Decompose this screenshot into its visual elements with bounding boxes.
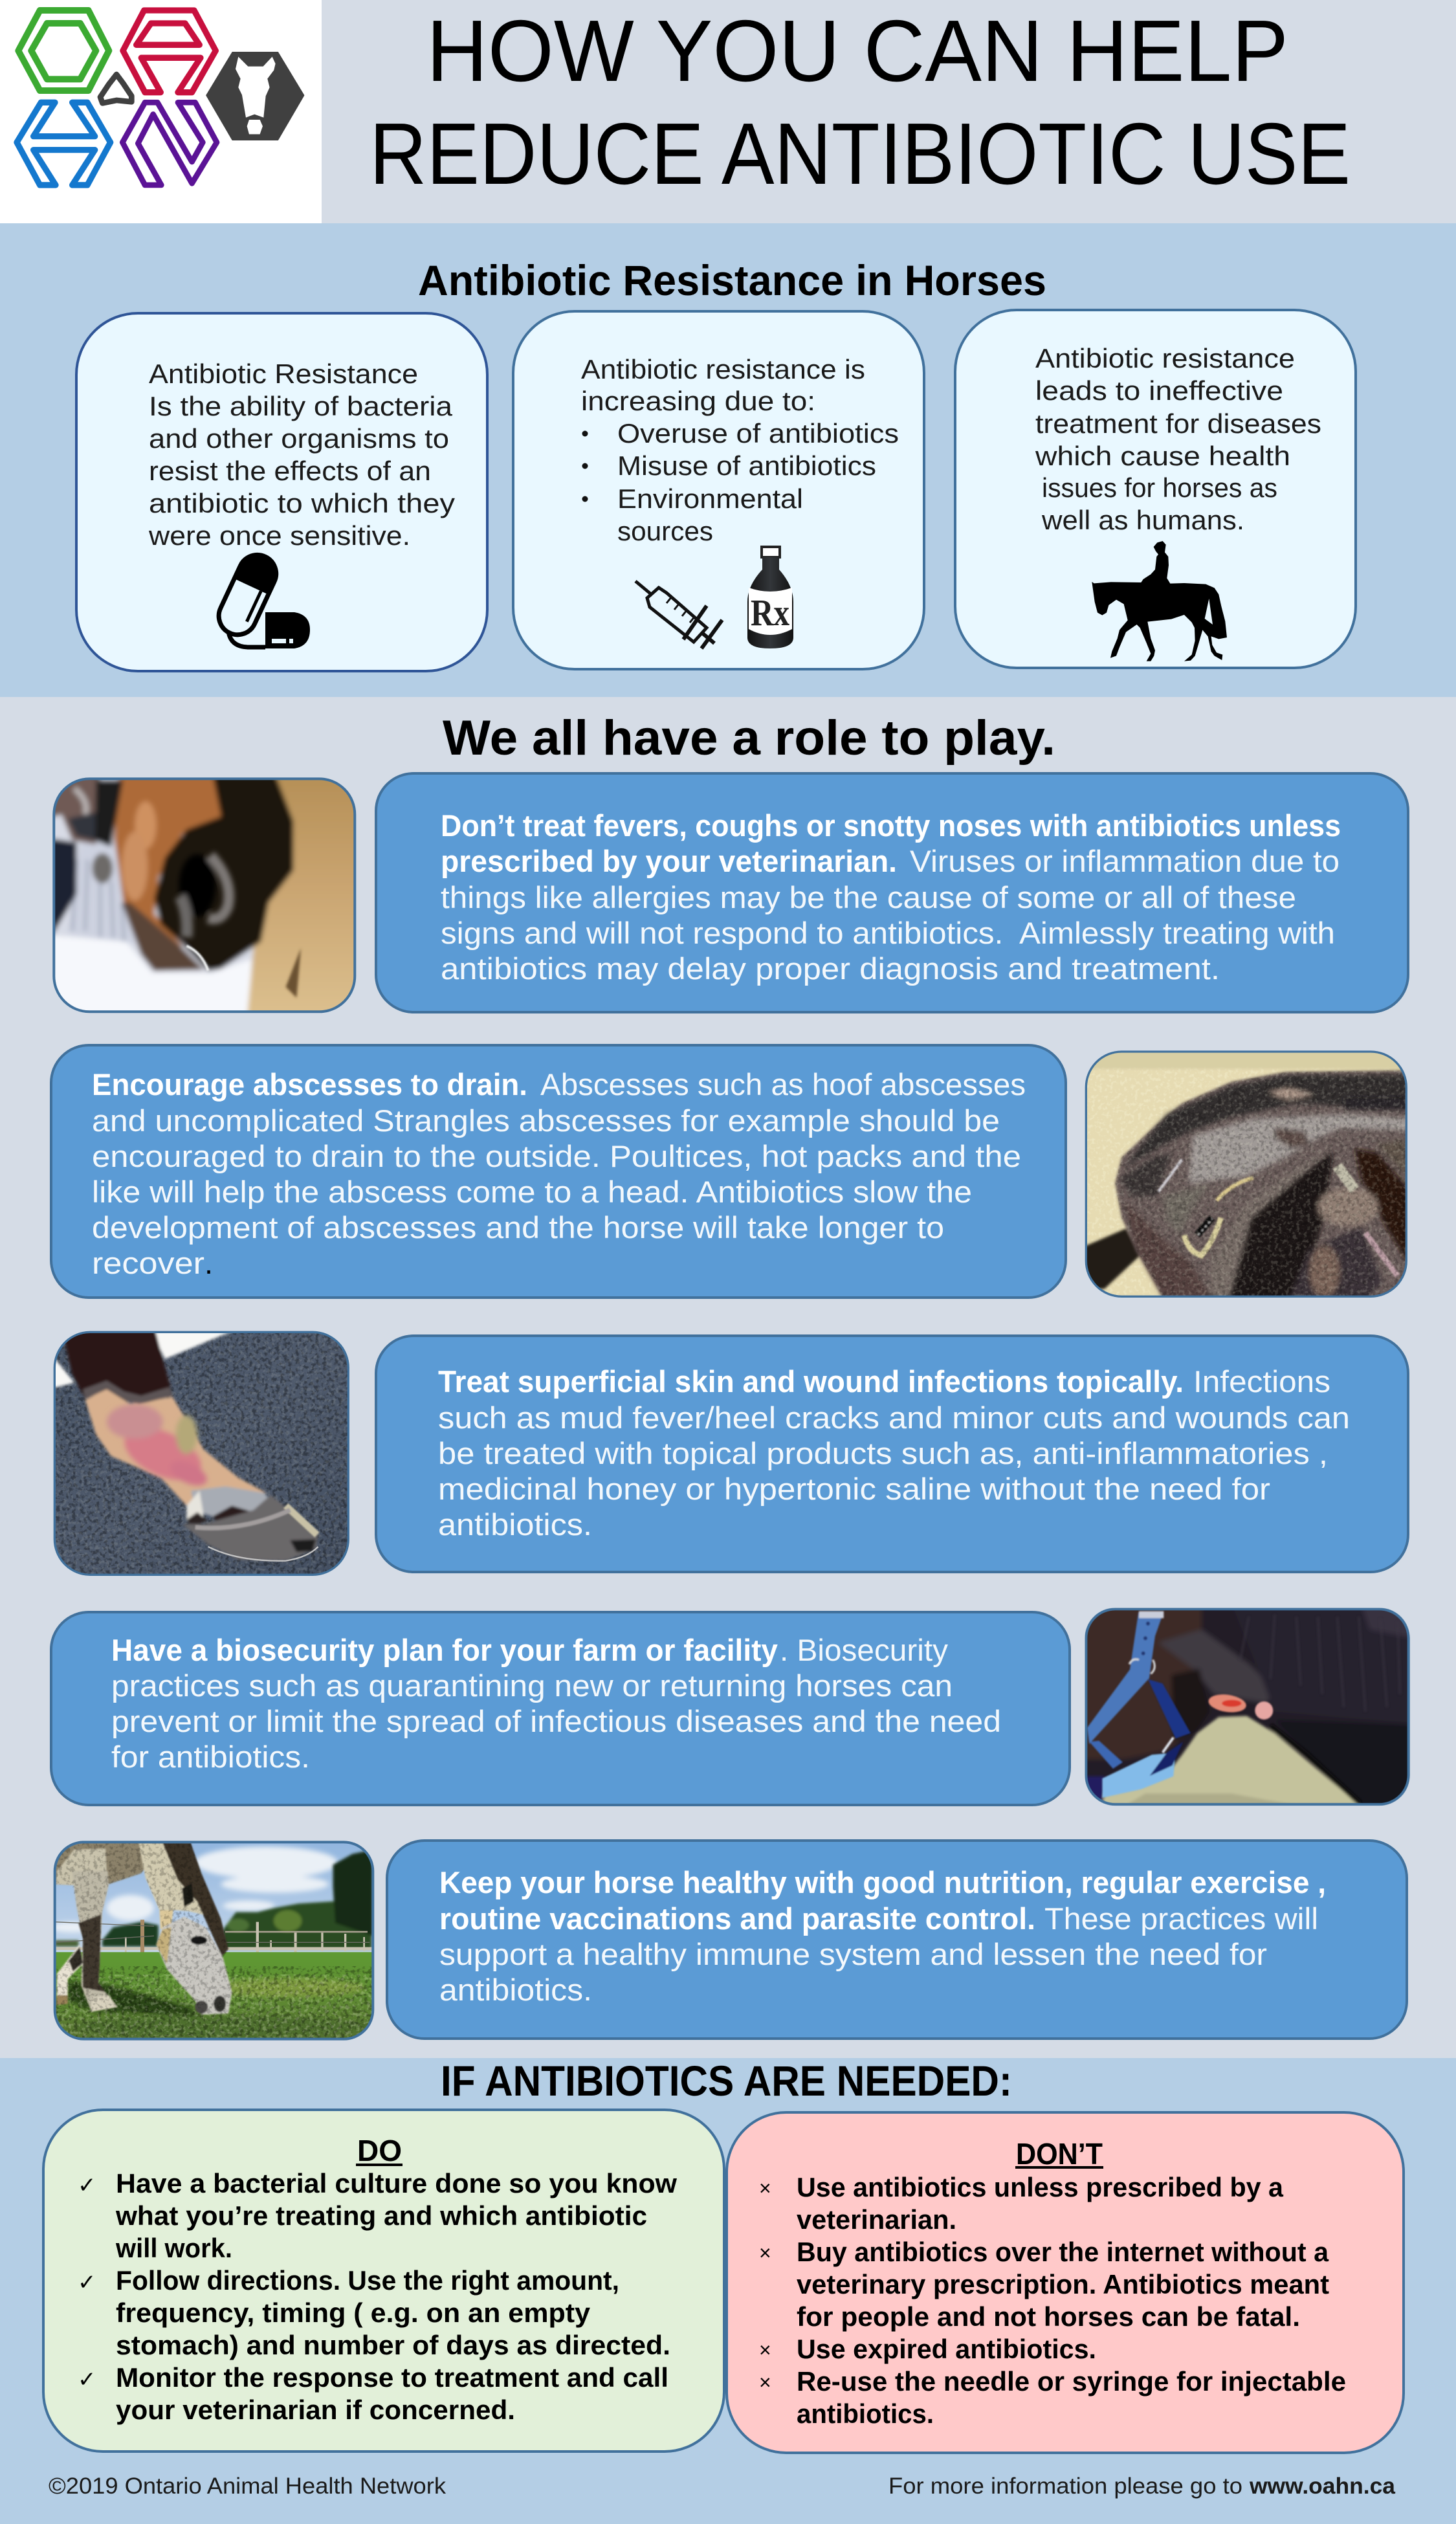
heading: we all have a role to play: We all have a role to play. <box>443 711 1055 766</box>
card: consequences: which cause health <box>1035 441 1290 471</box>
footer: copyright: ©2019 Ontario Animal Health Network <box>49 2474 447 2499</box>
card: consequences: treatment for diseases <box>1035 408 1321 439</box>
panel: don't: × <box>759 2176 771 2200</box>
panel: do: ✓ <box>78 2367 96 2393</box>
panel: encourage abscesses to drain: development of abscesses and the horse will take longer to <box>92 1210 944 1245</box>
panel: don't: Use antibiotics unless prescribed by a <box>797 2172 1284 2202</box>
panel: encourage abscesses to drain: and uncomplicated Strangles abscesses for example should be <box>92 1103 1000 1138</box>
icon: capsules <box>213 549 310 648</box>
panel: treat topically <box>376 1336 1408 1572</box>
panel: biosecurity plan: for antibiotics. <box>111 1740 310 1774</box>
panel: keep your horse healthy: antibiotics. <box>439 1973 592 2007</box>
panel: do: Have a bacterial culture done so you know <box>116 2168 677 2198</box>
panel: keep your horse healthy: These practices will <box>1044 1901 1318 1936</box>
card: definition <box>76 313 487 671</box>
card: causes <box>513 311 924 669</box>
card: causes: sources <box>617 516 713 546</box>
icon: syringe <box>635 581 722 648</box>
card: definition: antibiotic to which they <box>149 488 455 518</box>
card: consequences: well as humans. <box>1041 505 1244 535</box>
panel: do: will work. <box>115 2233 232 2263</box>
panel: encourage abscesses to drain: Abscesses such as hoof abscesses <box>540 1067 1026 1101</box>
card: causes: increasing due to: <box>581 386 815 416</box>
card: causes: Antibiotic resistance is <box>581 354 865 384</box>
card: consequences: Antibiotic resistance <box>1035 343 1295 373</box>
photo: leg with skin infection <box>49 1327 356 1582</box>
heading: antibiotic resistance in horses: Antibiotic Resistance in Horses <box>418 256 1046 304</box>
panel: don't: × <box>759 2241 771 2264</box>
title <box>370 2 1351 203</box>
panel: do: stomach) and number of days as directed. <box>116 2330 670 2360</box>
panel: biosecurity plan: Have a biosecurity plan for your farm or facility <box>111 1633 778 1667</box>
panel: treat topically: Treat superficial skin and wound infections topically. <box>438 1364 1184 1399</box>
panel: don't: antibiotics. <box>797 2398 934 2429</box>
panel: do <box>43 2110 724 2452</box>
panel: don't: Re-use the needle or syringe for injectable <box>797 2366 1346 2397</box>
card: definition: were once sensitive. <box>148 520 410 551</box>
panel: do: your veterinarian if concerned. <box>116 2395 515 2425</box>
panel: do: Monitor the response to treatment and call <box>116 2362 668 2393</box>
panel: don't treat fevers: antibiotics may delay proper diagnosis and treatment. <box>441 951 1220 986</box>
panel: do: ✓ <box>78 2173 96 2198</box>
panel: treat topically: be treated with topical products such as, anti-inflammatories , <box>438 1436 1328 1470</box>
panel: don't: × <box>759 2338 771 2362</box>
photo: horse nose with discharge <box>49 773 362 1019</box>
panel: keep your horse healthy <box>387 1841 1407 2039</box>
panel: do: frequency, timing ( e.g. on an empty <box>116 2297 591 2328</box>
card: definition: Antibiotic Resistance <box>149 359 418 389</box>
card: definition: resist the effects of an <box>149 456 431 486</box>
panel: treat topically: medicinal honey or hypertonic saline without the need for <box>438 1472 1270 1506</box>
panel: don't: veterinarian. <box>797 2204 956 2235</box>
panel: don't: DON’T <box>1016 2137 1103 2171</box>
panel: don't: × <box>759 2371 771 2394</box>
panel: encourage abscesses to drain: . <box>204 1246 213 1280</box>
footer: more information link <box>888 2474 1396 2499</box>
title: REDUCE ANTIBIOTIC USE <box>370 105 1351 203</box>
panel: biosecurity plan: prevent or limit the spread of infectious diseases and the need <box>111 1704 1001 1738</box>
panel: encourage abscesses to drain: Encourage abscesses to drain. <box>92 1067 527 1101</box>
panel: encourage abscesses to drain: recover <box>92 1246 204 1280</box>
card: definition: and other organisms to <box>149 423 449 454</box>
panel: do: ✓ <box>78 2270 96 2296</box>
panel: don't treat fevers: things like allergies may be the cause of some or all of these <box>441 880 1296 914</box>
panel: keep your horse healthy: support a healthy immune system and lessen the need for <box>439 1937 1267 1971</box>
panel: encourage abscesses to drain <box>51 1045 1066 1298</box>
photo: hoof abscess <box>1081 1045 1414 1304</box>
section: antibiotic resistance band <box>0 223 1456 697</box>
card: causes: Overuse of antibiotics <box>617 418 899 448</box>
heading: if antibiotics are needed: IF ANTIBIOTICS ARE NEEDED: <box>441 2057 1012 2105</box>
card: consequences: leads to ineffective <box>1035 375 1283 406</box>
panel: treat topically: Infections <box>1193 1364 1330 1399</box>
icon: Rx bottle <box>747 547 793 648</box>
card: causes: Misuse of antibiotics <box>617 450 876 481</box>
panel: don't: Buy antibiotics over the internet without a <box>797 2237 1329 2267</box>
header: logo <box>0 0 322 223</box>
card: consequences: issues for horses as <box>1042 472 1277 503</box>
panel: do: what you’re treating and which antibiotic <box>115 2200 647 2231</box>
card: causes: Environmental <box>617 483 803 514</box>
card: consequences <box>955 310 1356 668</box>
panel: encourage abscesses to drain: encouraged to drain to the outside. Poultices, hot packs and the <box>92 1139 1021 1173</box>
icon: horse and rider <box>1092 541 1227 661</box>
panel: don't treat fevers: Viruses or inflammation due to <box>910 844 1340 878</box>
panel: do: DO <box>357 2134 402 2167</box>
icon: Rx bottle: Rx <box>751 592 789 634</box>
panel: don't: for people and not horses can be fatal. <box>797 2301 1300 2332</box>
panel: keep your horse healthy: routine vaccinations and parasite control. <box>439 1901 1035 1936</box>
panel: treat topically: such as mud fever/heel cracks and minor cuts and wounds can <box>438 1400 1350 1435</box>
panel: don't: Use expired antibiotics. <box>797 2334 1096 2364</box>
panel: don't: veterinary prescription. Antibiotics meant <box>797 2269 1329 2299</box>
photo: grey horse grazing <box>50 1837 381 2042</box>
panel: biosecurity plan: . Biosecurity <box>780 1633 948 1667</box>
panel: don't treat fevers: signs and will not respond to antibiotics. Aimlessly treating with <box>441 916 1335 950</box>
footer: more information link: For more information please go to <box>888 2474 1242 2499</box>
panel: biosecurity plan <box>51 1612 1070 1805</box>
panel: don't <box>727 2112 1404 2453</box>
section: if antibiotics are needed band <box>0 2057 1456 2524</box>
panel: encourage abscesses to drain: like will help the abscess come to a head. Antibiotics slow the <box>92 1175 972 1209</box>
panel: biosecurity plan: practices such as quarantining new or returning horses can <box>111 1668 953 1703</box>
panel: treat topically: antibiotics. <box>438 1507 592 1542</box>
panel: do: Follow directions. Use the right amount, <box>116 2265 619 2296</box>
photo: horse with infected swelling under jaw <box>1081 1604 1414 1811</box>
footer: more information link: www.oahn.ca <box>1249 2474 1396 2499</box>
card: definition: Is the ability of bacteria <box>149 391 453 421</box>
panel: keep your horse healthy: Keep your horse healthy with good nutrition, regular exercise , <box>439 1865 1326 1899</box>
panel: don't treat fevers <box>376 773 1408 1012</box>
panel: don't treat fevers: prescribed by your veterinarian. <box>441 844 897 878</box>
panel: don't treat fevers: Don’t treat fevers, coughs or snotty noses with antibiotics unless <box>441 808 1341 843</box>
title: HOW YOU CAN HELP <box>426 2 1288 100</box>
